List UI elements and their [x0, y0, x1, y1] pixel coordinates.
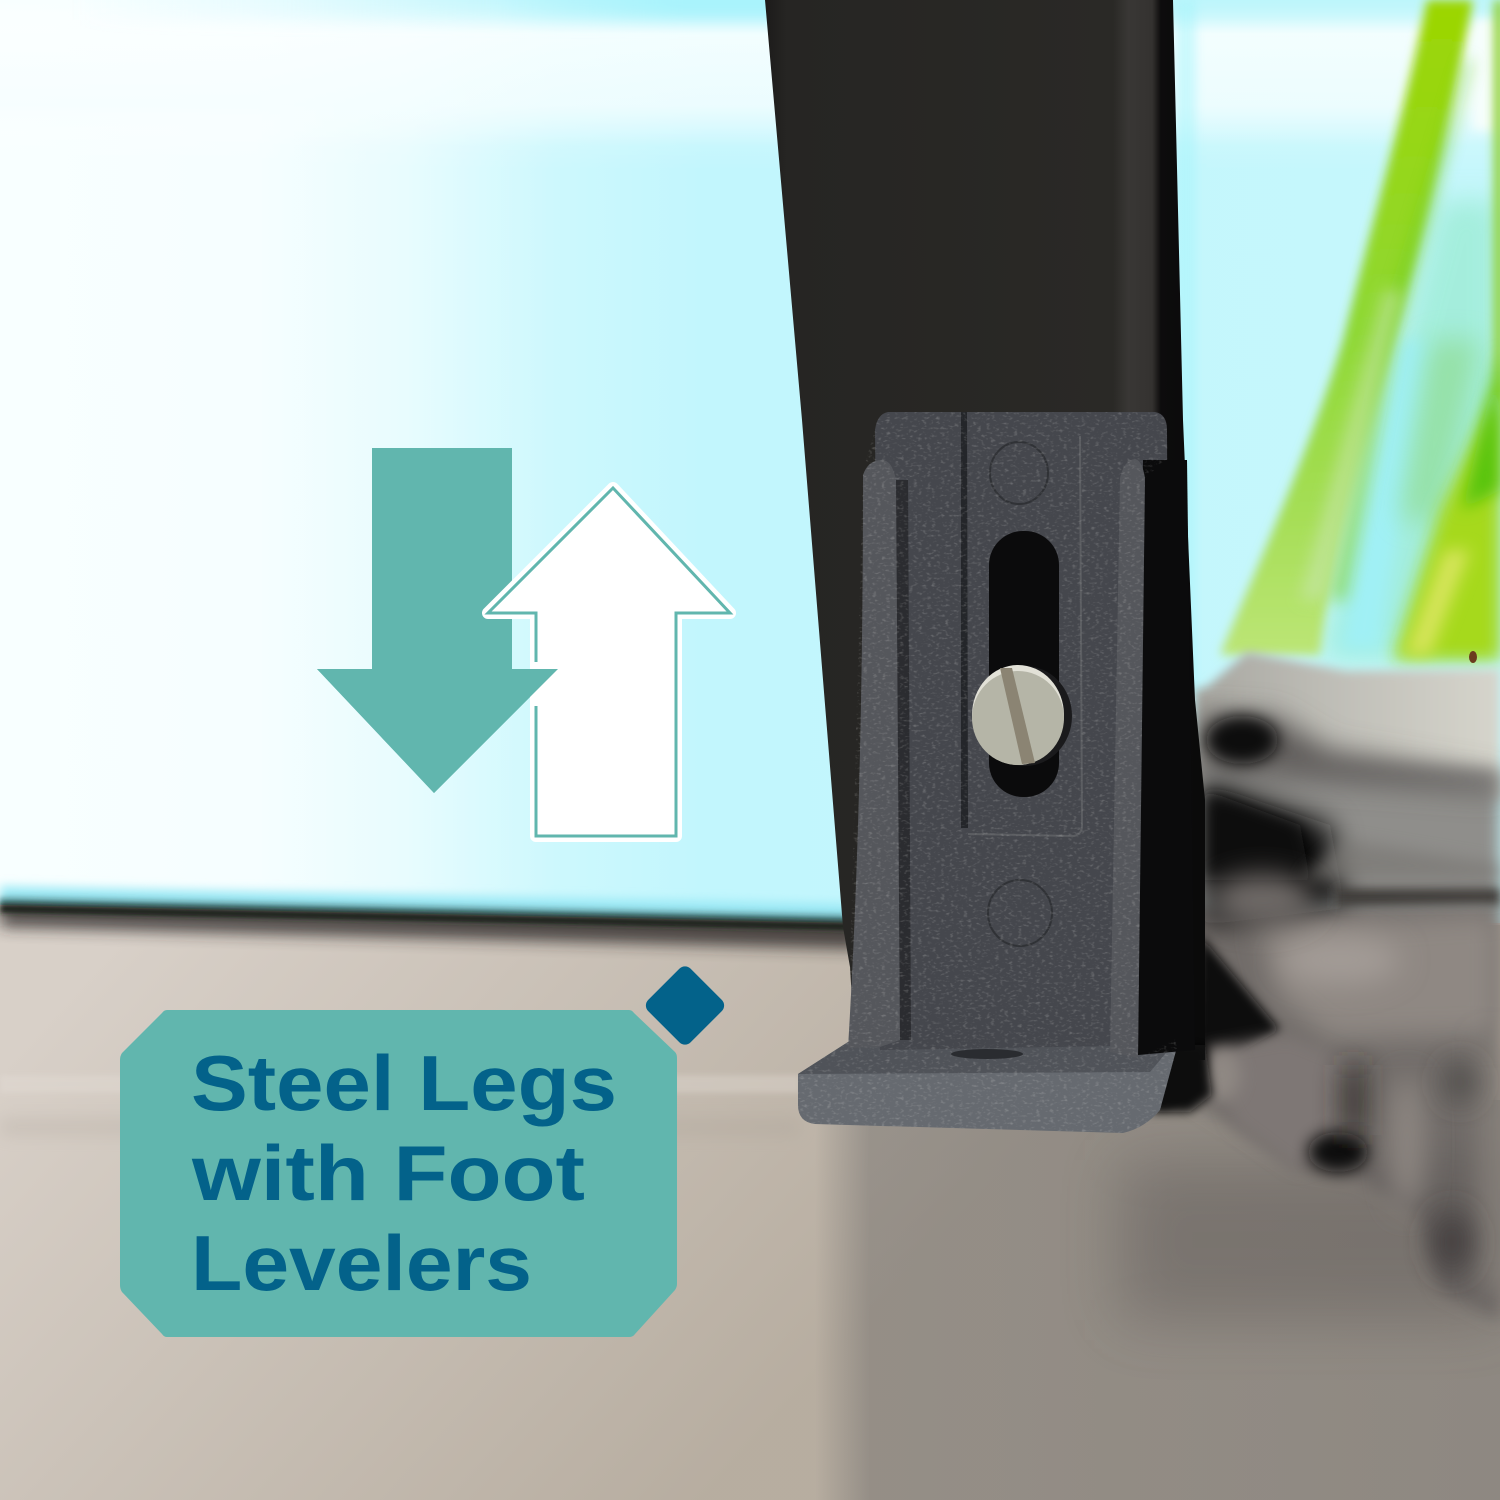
- background: desk surface: [0, 904, 1500, 1500]
- bracket: rib shadow: [892, 480, 911, 1040]
- bracket: base top face: [798, 1036, 1180, 1074]
- bracket: plastic texture: [798, 412, 1177, 1133]
- bracket: back plate: [875, 412, 1170, 1050]
- callout: label panel: [120, 1010, 677, 1337]
- steel leg: [765, 0, 1205, 1060]
- icon: up arrow: [488, 488, 730, 836]
- leg base shadow: [1150, 1045, 1212, 1112]
- callout: heading text: with Foot: [191, 1129, 585, 1217]
- bracket: inner groove: [961, 412, 968, 828]
- plant: green leaves: [1220, 0, 1500, 660]
- background: blurred sky: [0, 0, 1500, 930]
- bracket: right rib: [1110, 459, 1145, 1058]
- bracket: left rib: [848, 460, 900, 1048]
- callout: heading text: [191, 1039, 617, 1307]
- icon: down arrow: [317, 448, 558, 793]
- bracket: screw: [972, 665, 1072, 766]
- icon: blue diamond: [643, 963, 727, 1048]
- planter: grey fabric base: [1120, 651, 1500, 1320]
- callout: heading text: Levelers: [191, 1219, 532, 1307]
- bracket: base plate: [798, 1036, 1180, 1133]
- callout: heading text: Steel Legs: [191, 1039, 617, 1127]
- foot leveler bracket: [798, 412, 1188, 1133]
- bracket: adjustment slot: [989, 531, 1059, 797]
- bracket: base hole: [951, 1049, 1023, 1059]
- icon: down arrow head overlap: [317, 669, 558, 793]
- bracket: right shadow: [1138, 460, 1195, 1055]
- bracket: circular marks: [988, 442, 1052, 946]
- bracket: recess edge: [968, 436, 1082, 836]
